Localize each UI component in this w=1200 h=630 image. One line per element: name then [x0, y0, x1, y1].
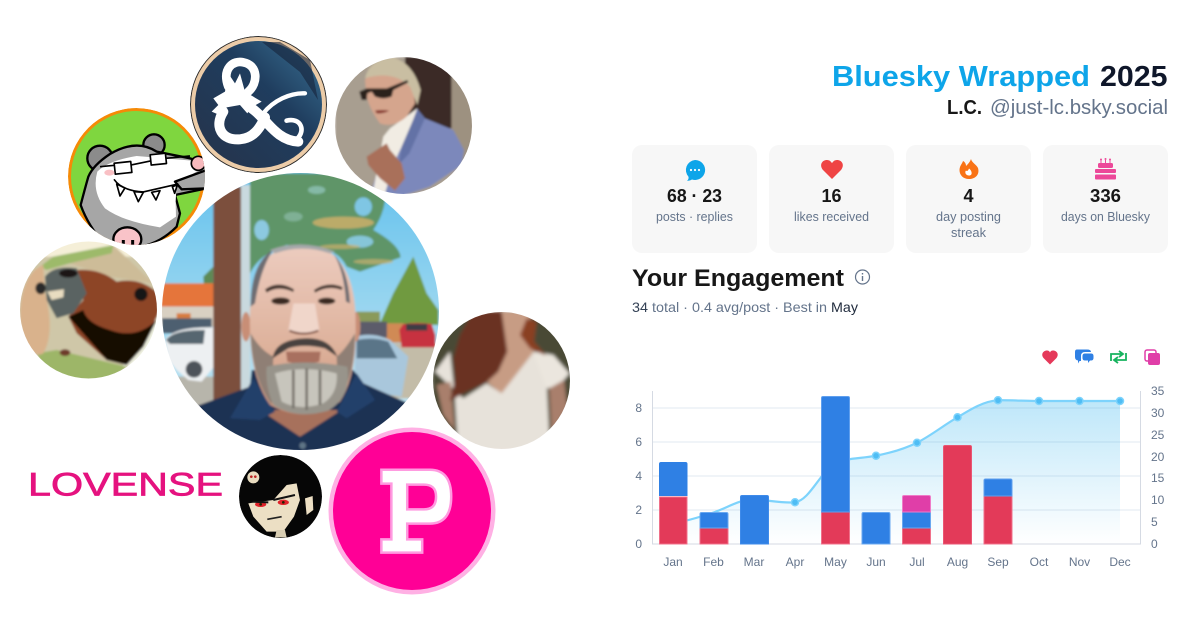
heading: Your Engagement: Your Engagement	[632, 265, 844, 292]
stat card: likes received	[769, 145, 894, 253]
stat card: posts and replies	[632, 145, 757, 253]
legend: quotes	[1145, 350, 1160, 365]
right axis labels: 15	[1151, 471, 1165, 485]
left axis labels: 4	[635, 469, 642, 483]
month labels: Mar	[744, 555, 764, 569]
right axis labels: 25	[1151, 428, 1165, 442]
month labels: Jan	[663, 555, 683, 569]
month labels: Nov	[1069, 555, 1090, 569]
line points	[792, 397, 1124, 506]
avatar: woman in white top	[432, 311, 572, 452]
engagement summary: 34	[632, 299, 648, 315]
chart legend icons	[1042, 350, 1160, 365]
icon: chat bubble	[686, 160, 705, 181]
bars	[660, 396, 1012, 544]
stat card: days on Bluesky: 336	[1090, 186, 1121, 206]
right axis labels	[1151, 384, 1165, 551]
cumulative line	[673, 400, 1120, 524]
legend: likes	[1042, 350, 1058, 364]
avatar: man in blue blazer presenting	[335, 57, 473, 197]
stat card: day posting streak: 4	[963, 186, 974, 206]
chart: monthly engagement bars and cumulative line	[635, 384, 1165, 569]
right axis labels: 35	[1151, 384, 1165, 398]
title: Bluesky Wrapped 2025: 2025	[1100, 61, 1168, 93]
stat card: posts and replies: 68 · 23	[667, 186, 722, 206]
month labels: Aug	[947, 555, 968, 569]
month labels: Jun	[866, 555, 886, 569]
user name and handle: L.C.	[947, 97, 982, 119]
icon: heart	[821, 160, 843, 179]
month labels: Sep	[987, 555, 1009, 569]
right axis labels: 0	[1151, 537, 1158, 551]
avatar: Patreon-style P logo	[328, 428, 496, 594]
engagement summary: May	[831, 299, 858, 315]
stat card: days on Bluesky	[1043, 145, 1168, 253]
avatar: horse and goat close-up	[17, 240, 160, 380]
logo: Lovense: LOVENSE	[28, 466, 223, 502]
icon: info	[856, 270, 870, 284]
left axis labels: 2	[635, 503, 642, 517]
stat card: days on Bluesky: days on Bluesky	[1061, 210, 1151, 224]
month labels	[663, 555, 1131, 569]
icon: flame	[960, 159, 978, 179]
stat card: likes received: likes received	[794, 210, 869, 224]
right axis labels: 5	[1151, 515, 1158, 529]
stat card: likes received: 16	[822, 186, 842, 206]
avatar: main profile photo	[160, 170, 442, 453]
month labels: Apr	[786, 555, 804, 569]
title: Bluesky Wrapped 2025: Bluesky Wrapped	[832, 61, 1090, 93]
user name and handle: @just-lc.bsky.social	[990, 97, 1168, 119]
avatar: goth anime girl	[239, 455, 322, 538]
month labels: Jul	[909, 555, 925, 569]
right axis labels: 10	[1151, 493, 1165, 507]
right axis labels: 30	[1151, 406, 1165, 420]
engagement summary: total · 0.4 avg/post · Best in	[652, 299, 827, 315]
stat card: posts and replies: posts · replies	[656, 210, 733, 224]
right axis labels: 20	[1151, 450, 1165, 464]
stat card: day posting streak: streak	[951, 226, 987, 240]
month labels: Feb	[703, 555, 724, 569]
stat card: day posting streak: day posting	[936, 210, 1001, 224]
avatar: opossum cartoon	[68, 108, 207, 251]
month labels: Oct	[1030, 555, 1049, 569]
month labels: May	[824, 555, 847, 569]
legend: replies	[1075, 350, 1094, 364]
stat card: day posting streak	[906, 145, 1031, 253]
left axis labels: 0	[635, 537, 642, 551]
cumulative area	[673, 400, 1120, 544]
left axis labels: 8	[635, 401, 642, 415]
left axis labels: 6	[635, 435, 642, 449]
legend: reposts	[1111, 351, 1126, 363]
avatar: Dungeons and Dragons ampersand	[190, 36, 327, 173]
icon: birthday cake	[1095, 158, 1116, 180]
month labels: Dec	[1109, 555, 1131, 569]
left axis labels	[635, 401, 642, 551]
